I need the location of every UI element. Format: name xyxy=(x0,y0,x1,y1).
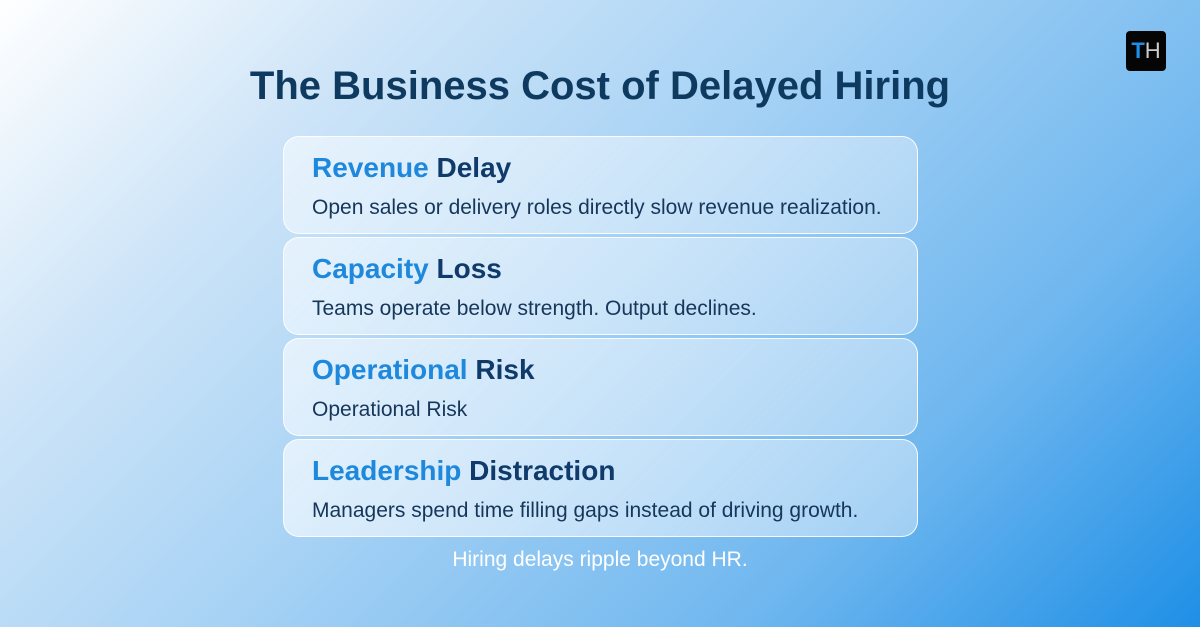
logo xyxy=(1126,31,1166,71)
heading: Revenue Delay xyxy=(312,152,511,183)
logo: TH xyxy=(1131,38,1161,63)
card: revenue delay xyxy=(283,136,918,234)
card: operational risk: Operational Risk xyxy=(312,398,467,421)
card: leadership distraction: Managers spend time filling gaps instead of driving growth. xyxy=(312,499,858,522)
card: capacity loss xyxy=(283,237,918,335)
heading: Capacity Loss xyxy=(312,253,502,284)
title: The Business Cost of Delayed Hiring xyxy=(250,64,950,108)
heading: Operational Risk xyxy=(312,354,535,385)
card: capacity loss: Teams operate below strength. Output declines. xyxy=(312,297,757,320)
footer text: Hiring delays ripple beyond HR. xyxy=(452,548,748,571)
card: revenue delay: Open sales or delivery roles directly slow revenue realization. xyxy=(312,196,882,219)
card: operational risk xyxy=(283,338,918,436)
heading: Leadership Distraction xyxy=(312,455,615,486)
card: leadership distraction xyxy=(283,439,918,537)
